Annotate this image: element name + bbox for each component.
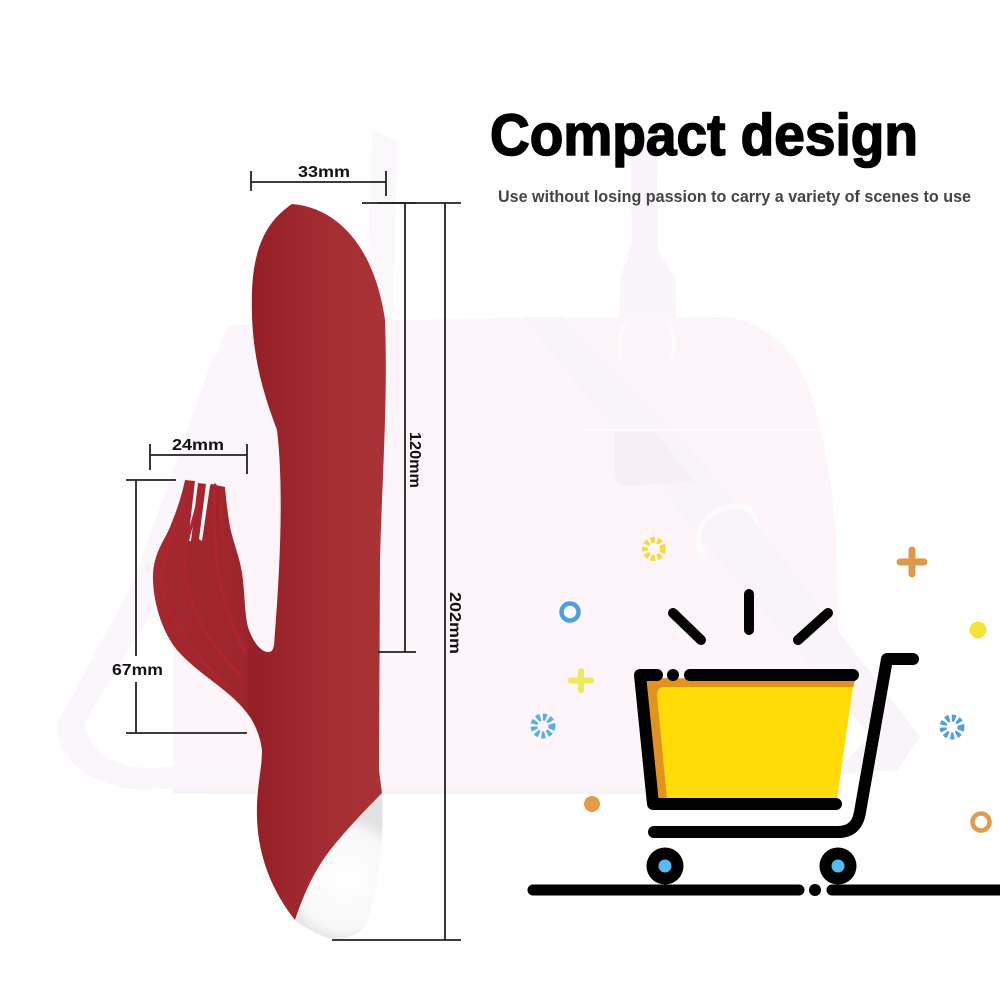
subtitle: Use without losing passion to carry a variety of scenes to use	[498, 188, 971, 206]
dimension: 24mm: 24mm	[172, 437, 224, 454]
icon: shopping cart	[533, 594, 1000, 896]
product silhouette: main body and petals	[153, 204, 386, 939]
decorative stars and dots	[534, 540, 990, 830]
dimension: 33mm	[251, 164, 386, 196]
petal strands	[162, 482, 245, 687]
dimension: 202mm: 202mm	[446, 592, 463, 654]
title: Compact design	[490, 103, 918, 168]
background handbag illustration	[57, 130, 920, 794]
dimension: 67mm: 67mm	[112, 662, 163, 679]
dimension: 202mm	[332, 203, 463, 940]
dimension: 67mm	[112, 480, 247, 733]
dimension: 33mm: 33mm	[298, 164, 350, 181]
dimension: 24mm	[150, 437, 247, 474]
dimension: 120mm	[378, 203, 423, 652]
dimension: 120mm: 120mm	[406, 432, 423, 488]
